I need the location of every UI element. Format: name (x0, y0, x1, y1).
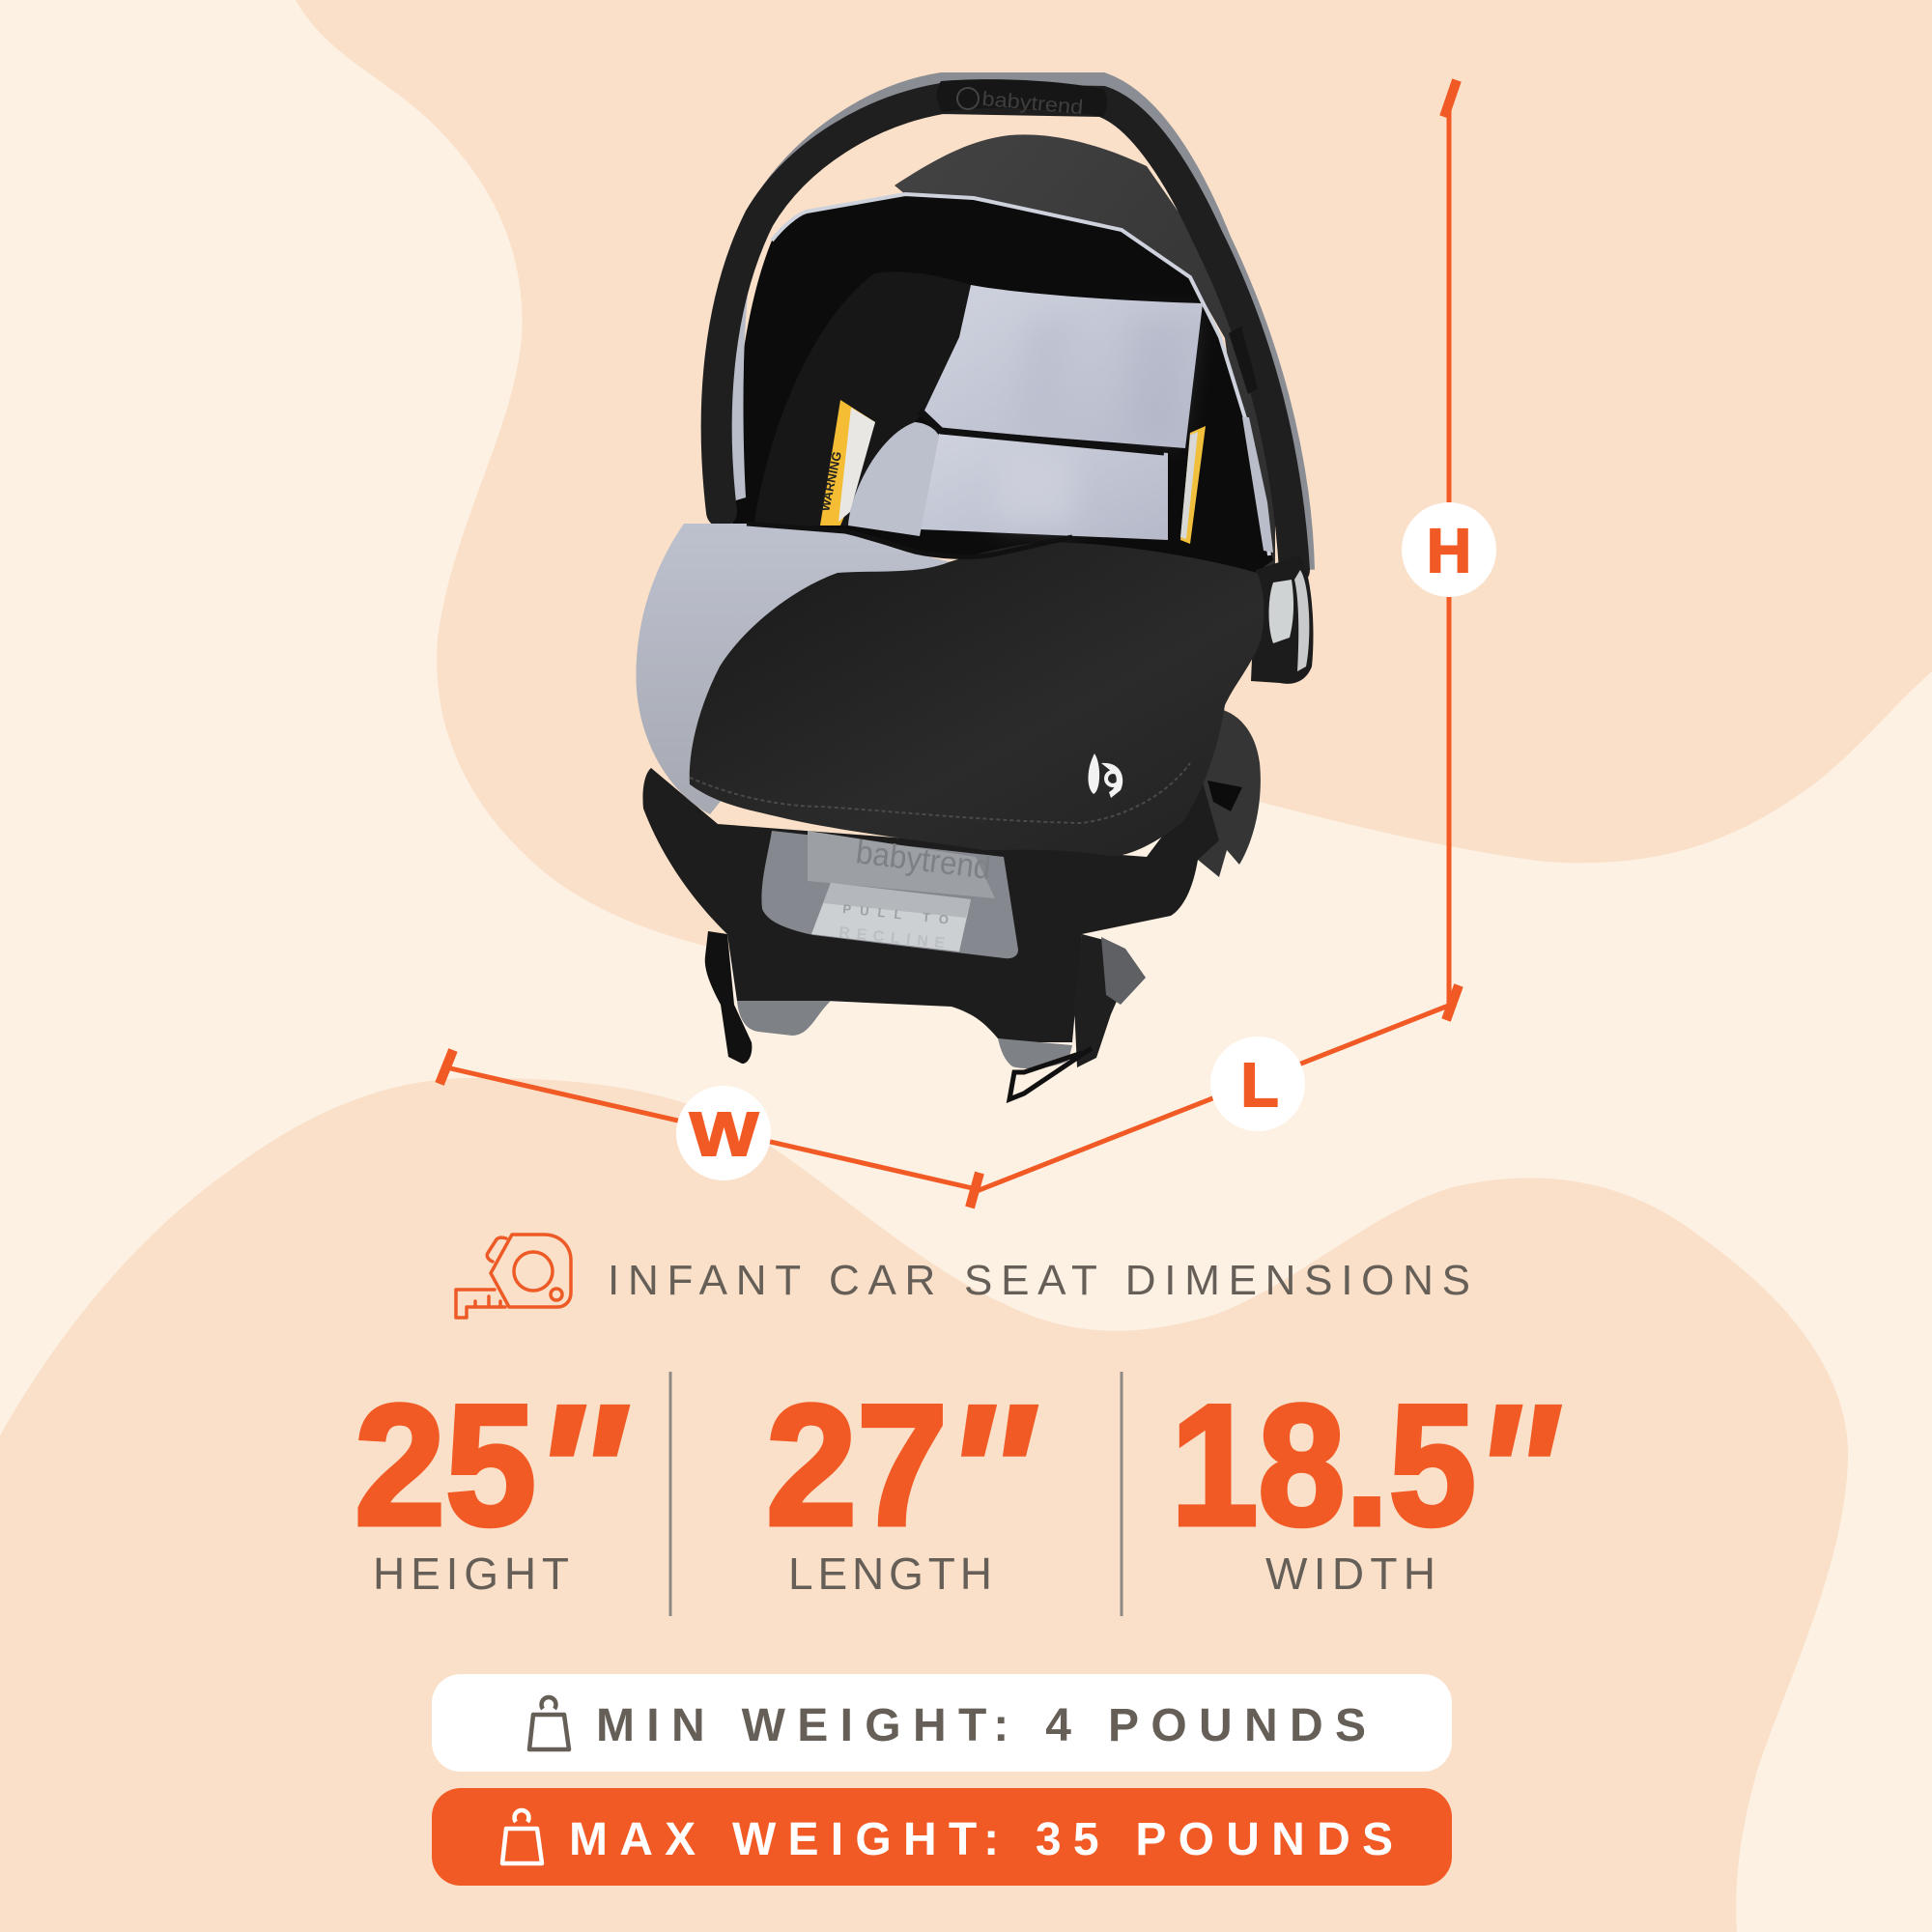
warning label right (1180, 426, 1206, 544)
stat: length: " (941, 1363, 1037, 1587)
handle hub with push button (1251, 555, 1313, 684)
stat: height: " (528, 1363, 629, 1587)
left harness pad (848, 422, 939, 536)
chest strap (920, 411, 1164, 452)
stat: length: LENGTH (788, 1548, 992, 1599)
label badge H (1402, 502, 1496, 597)
min weight pill: MIN WEIGHT: 4 POUNDS (596, 1700, 1366, 1751)
stat: length: 27 (766, 1369, 948, 1561)
dimension line: width (440, 1050, 977, 1189)
footmuff opening edge (747, 524, 1072, 556)
warning label left (817, 400, 875, 526)
stat: width: 18.5 (1171, 1369, 1476, 1561)
canopy left lining (727, 261, 752, 502)
icon: tape measure (456, 1235, 571, 1318)
label badge W: W (690, 1099, 759, 1169)
stat: length (766, 1363, 1037, 1599)
footmuff black cover (690, 542, 1264, 856)
handle grip (937, 79, 1107, 119)
dimension line: length (970, 1005, 1451, 1208)
heading: INFANT CAR SEAT DIMENSIONS (608, 1257, 1470, 1304)
background blob: bottom (0, 1078, 1848, 1932)
min weight pill (432, 1674, 1452, 1772)
background blob: top right (296, 0, 1932, 956)
icon: weight (502, 1810, 542, 1863)
stat: width: " (1470, 1363, 1561, 1587)
label badge W (676, 1086, 771, 1180)
dimension line: height (1402, 80, 1496, 1020)
recline recess (761, 831, 1018, 958)
right strap and buckle (1009, 934, 1146, 1099)
canopy interior (730, 194, 1273, 580)
base grey feet (737, 1001, 831, 1036)
footmuff grey panel (636, 524, 952, 814)
seat side padding (753, 271, 971, 529)
max weight pill (432, 1788, 1452, 1886)
handle back edge (773, 85, 1302, 570)
base slot (1208, 781, 1242, 811)
canopy side lining (1242, 417, 1273, 553)
label badge L: L (1240, 1050, 1279, 1120)
logo on recess: babytrend (854, 834, 993, 887)
stat: height (355, 1363, 629, 1599)
footmuff logo (1088, 753, 1122, 798)
canopy shell (895, 134, 1275, 580)
stat: width (1171, 1363, 1561, 1599)
stat: width: WIDTH (1265, 1548, 1435, 1599)
icon: weight (529, 1697, 569, 1749)
max weight pill: MAX WEIGHT: 35 POUNDS (569, 1814, 1393, 1865)
warning label left: WARNING (817, 450, 844, 513)
handle side tag (1229, 327, 1258, 394)
label badge L (1210, 1037, 1305, 1131)
divider (1121, 1372, 1122, 1616)
upper back pad (924, 285, 1203, 448)
handle tube (717, 99, 1294, 570)
canopy front piping (772, 194, 1269, 555)
infant car seat illustration (636, 79, 1313, 1099)
stat: height: HEIGHT (373, 1548, 569, 1599)
left strap (705, 931, 752, 1064)
recline lever: PULL TO (842, 901, 950, 926)
label badge H: H (1427, 516, 1471, 585)
handle grip: babytrend (981, 88, 1084, 119)
lower back pad (920, 433, 1168, 540)
recline lever (811, 883, 971, 952)
seat base (642, 709, 1261, 1099)
stat: height: 25 (355, 1369, 536, 1561)
recline lever: RECLINE (838, 924, 946, 952)
divider (668, 1372, 672, 1616)
